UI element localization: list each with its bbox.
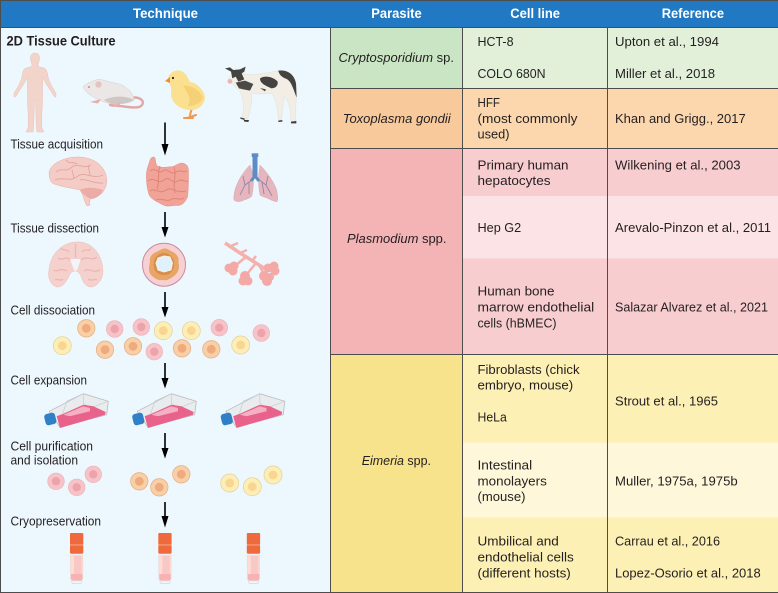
cell line: Intestinal monolayers: monolayers — [478, 473, 547, 488]
cell line: Umbilical and endothelial cells: endothelial cells — [478, 549, 574, 564]
panel title: 2D Tissue Culture: 2D Tissue Culture — [6, 32, 116, 48]
icon: cow — [225, 67, 297, 123]
panel: Cryptosporidium row — [331, 28, 778, 88]
cell line: Umbilical and endothelial cells: Umbilical and — [478, 533, 559, 548]
reference: Arevalo-Pinzon: Arevalo-Pinzon et al., 2011 — [615, 220, 771, 235]
arrow 2 — [162, 212, 168, 238]
cell line: Umbilical and endothelial cells: (different hosts) — [478, 565, 571, 580]
cell line: hBMEC: cells (hBMEC) — [478, 315, 556, 330]
panel: Eimeria row — [331, 355, 778, 592]
label: Cell purification and isolation — [10, 438, 93, 468]
label: Cell expansion: Cell expansion — [10, 373, 87, 388]
parasite: Plasmodium spp.: Plasmodium spp. — [347, 231, 446, 246]
cells: purified populations — [48, 466, 282, 496]
reference: Miller: Miller et al., 2018 — [615, 66, 715, 81]
cell line: Primary human hepatocytes — [478, 158, 568, 188]
reference: Muller: Muller, 1975a, 1975b — [615, 473, 738, 488]
panel: Toxoplasma row — [331, 89, 778, 148]
cell line: COLO 680N: COLO 680N — [478, 66, 546, 81]
cell line: HFF: used) — [478, 126, 510, 142]
cell line: hBMEC: marrow endothelial — [478, 300, 594, 315]
cell line: Fibroblasts — [478, 362, 580, 392]
icon: intestine cross-section — [142, 243, 186, 286]
panel: technique workflow — [1, 28, 330, 592]
cell line: HFF: HFF — [478, 95, 500, 110]
reference: Strout: Strout et al., 1965 — [615, 394, 718, 409]
icon: lungs — [234, 153, 278, 202]
heading: Parasite: Parasite — [371, 5, 422, 21]
icon: brain — [49, 157, 107, 206]
header row — [1, 1, 778, 27]
cell line: Primary human hepatocytes: hepatocytes — [478, 173, 551, 188]
cell line: Intestinal monolayers: Intestinal — [478, 458, 532, 473]
icon: brain section — [49, 242, 103, 287]
heading: Technique: Technique — [133, 5, 198, 21]
icon: small intestine — [146, 157, 188, 206]
cell line: HCT-8: HCT-8 — [478, 34, 514, 49]
cell line: HFF: (most commonly — [478, 111, 578, 126]
cell line: Hep G2: Hep G2 — [478, 220, 521, 235]
cell line: HFF — [478, 95, 578, 142]
cell line: Fibroblasts: embryo, mouse) — [478, 378, 573, 392]
icon: lung bronchiole — [224, 243, 280, 286]
reference: Khan and Grigg: Khan and Grigg., 2017 — [615, 111, 746, 126]
cells: mixed dissociated cells — [53, 319, 270, 360]
icon: human — [14, 53, 56, 132]
arrow 4 — [162, 363, 168, 388]
reference: Wilkening: Wilkening et al., 2003 — [615, 158, 741, 172]
cell line: HeLa: HeLa — [478, 410, 508, 425]
parasite: Toxoplasma gondii: Toxoplasma gondii — [343, 111, 452, 126]
cell line: Primary human hepatocytes: Primary human — [478, 158, 568, 172]
panel: Plasmodium row — [331, 149, 778, 354]
icon: mouse — [83, 79, 143, 107]
heading: Reference: Reference — [662, 5, 724, 21]
heading: Cell line: Cell line — [510, 5, 560, 21]
cell line: Intestinal monolayers: (mouse) — [478, 489, 526, 504]
reference: Upton: Upton et al., 1994 — [615, 34, 719, 49]
label: Cell purification and isolation: and isolation — [10, 453, 78, 468]
arrow 1 — [162, 122, 168, 156]
reference: Carrau: Carrau et al., 2016 — [615, 533, 720, 548]
label: Cell dissociation: Cell dissociation — [10, 302, 95, 317]
reference: Salazar Alvarez: Salazar Alvarez et al., 2021 — [615, 300, 768, 315]
reference: Lopez-Osorio: Lopez-Osorio et al., 2018 — [615, 565, 761, 580]
parasite: Cryptosporidium sp.: Cryptosporidium sp. — [338, 50, 454, 65]
label: Cell purification and isolation: Cell purification — [10, 438, 93, 453]
arrow 5 — [162, 433, 168, 458]
arrow 3 — [162, 292, 168, 318]
cell line: Fibroblasts: Fibroblasts (chick — [478, 362, 580, 377]
cell line: Umbilical and endothelial cells — [478, 533, 574, 580]
cell line: hBMEC: Human bone — [478, 284, 554, 299]
label: Tissue dissection: Tissue dissection — [10, 221, 99, 236]
label: Tissue acquisition: Tissue acquisition — [10, 136, 103, 152]
icon: cryovials — [70, 533, 260, 584]
arrow 6 — [162, 502, 168, 528]
icon: culture flasks — [44, 394, 285, 428]
label: Cryopreservation: Cryopreservation — [10, 514, 101, 529]
parasite: Eimeria spp.: Eimeria spp. — [362, 453, 431, 468]
icon: chick — [165, 70, 205, 118]
cell line: Intestinal monolayers — [478, 458, 547, 504]
cell line: hBMEC — [478, 284, 594, 330]
